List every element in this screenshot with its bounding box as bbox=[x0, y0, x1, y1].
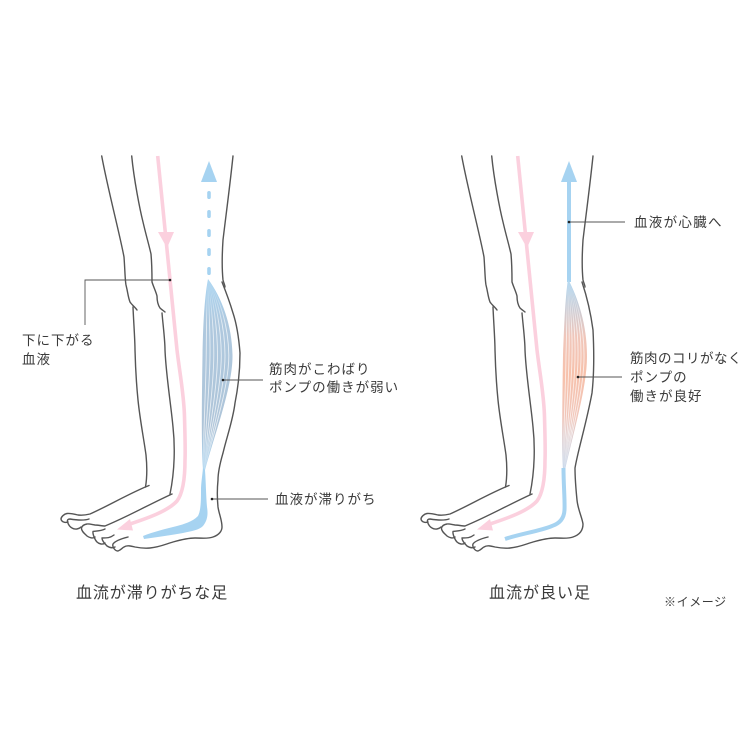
callout: stiff muscle weak pump: ポンプの働きが弱い bbox=[269, 380, 399, 395]
blood flowing through ankle and foot bbox=[505, 468, 565, 539]
calf muscle: relaxed, salmon bbox=[562, 279, 587, 470]
artery: pink downward arrow bbox=[477, 156, 545, 530]
heading: poor circulation leg: 血流が滞りがちな足 bbox=[76, 584, 228, 602]
callout: stiff muscle weak pump: 筋肉がこわばり bbox=[269, 361, 370, 377]
callout: blood stagnates: 血液が滞りがち bbox=[275, 492, 376, 507]
artery: pink downward arrow bbox=[117, 156, 185, 530]
leg outline: rear and front legs bbox=[61, 156, 240, 551]
vein: solid blue upward arrow bbox=[561, 161, 577, 282]
callout: no stiffness good pump: 働きが良好 bbox=[630, 389, 702, 404]
callout: no stiffness good pump: 筋肉のコリがなく bbox=[630, 350, 742, 366]
callout: blood to heart: 血液が心臓へ bbox=[634, 215, 723, 230]
calf muscle: stiff, blue-grey bbox=[202, 279, 233, 470]
heading: good circulation leg: 血流が良い足 bbox=[489, 584, 591, 602]
pooled blood in ankle and foot bbox=[143, 468, 208, 539]
panel: poor circulation leg bbox=[61, 156, 240, 551]
vein: dashed blue upward arrow bbox=[201, 161, 217, 275]
callout: blood sinks down bbox=[22, 279, 171, 367]
leg outline: rear and front legs bbox=[421, 156, 594, 551]
callout: blood sinks down: 下に下がる bbox=[22, 333, 94, 348]
panel: good circulation leg bbox=[421, 156, 594, 551]
callout: blood sinks down: 血液 bbox=[22, 352, 51, 367]
callout: no stiffness good pump: ポンプの bbox=[630, 370, 688, 385]
note: image only: ※イメージ bbox=[664, 595, 727, 609]
callout: stiff muscle weak pump bbox=[222, 361, 399, 395]
callout: no stiffness good pump bbox=[577, 350, 742, 404]
